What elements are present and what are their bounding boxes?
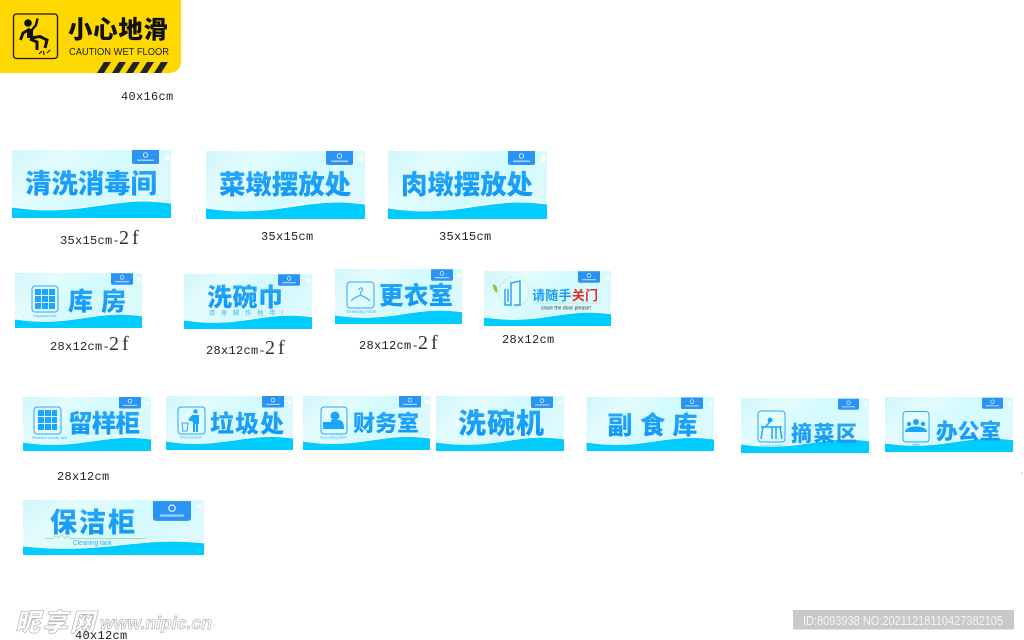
icon: picking table (758, 411, 785, 442)
sign caption: Cleaning tank (73, 540, 112, 547)
sign: 洗碗巾 (184, 274, 312, 329)
size label: 28x12cm (57, 470, 110, 484)
sign: 菜墩摆放处 (206, 151, 365, 219)
icon: people (903, 412, 929, 442)
sign caption: Dressing room (347, 309, 377, 314)
sign caption: office (912, 443, 920, 447)
sign: 财务室 (303, 396, 430, 450)
sign title: 保洁柜 (50, 508, 135, 538)
sign: 洗碗机 (436, 396, 564, 451)
icon: hanger (347, 282, 374, 308)
watermark: nipic: 昵享网 (15, 609, 99, 637)
caution title: 小心地滑 (68, 16, 168, 44)
sign title: 更衣室 (379, 281, 453, 310)
sign title: 库房 (68, 288, 126, 316)
size label: 28x12cm-2f (359, 332, 441, 354)
watermark: nipic: www.nipic.cn (100, 613, 212, 633)
icon: door with leaf (493, 277, 529, 307)
sign caption: close the door please! (541, 306, 591, 312)
sign title: 财务室 (353, 411, 419, 436)
sign: 更衣室 (335, 269, 462, 324)
sign: 请随手关门 (484, 271, 611, 326)
icon: grid (32, 286, 58, 312)
sign caption: Disposal Area (180, 436, 202, 440)
sign title: 摘菜区 (791, 422, 857, 446)
sign title: 办公室 (936, 419, 1001, 444)
watermark: nipic (15, 609, 212, 637)
sign title: 清洗消毒间 (25, 169, 157, 199)
image id text: ID:8093938 NO:20211218110427382105 (803, 614, 1003, 628)
size label 40x16: 40x16cm (121, 90, 174, 104)
sign caption: Disposal Area (33, 314, 57, 318)
sign caption: Retention sample cark (32, 436, 67, 440)
icon: cabinet (34, 407, 61, 434)
sign title: 垃圾处 (210, 410, 284, 438)
sign: 摘菜区 (741, 398, 869, 453)
sign caption: 请身脚作他用! (209, 309, 283, 317)
hazard stripes (97, 62, 168, 73)
size label: 28x12cm-2f (206, 337, 288, 359)
icon: accountant (321, 407, 347, 434)
sign title: 洗碗巾 (207, 284, 283, 312)
sign: 肉墩摆放处 (388, 151, 547, 219)
sign title: 留样柜 (68, 409, 140, 438)
image id bar (793, 610, 1014, 630)
sign title: 洗碗机 (458, 407, 544, 439)
sign title: 副食库 (608, 411, 698, 440)
caution sign: wet floor (0, 0, 181, 73)
sign: 留样柜 (23, 397, 151, 451)
icon: person and bin (178, 407, 205, 434)
sign: 副食库 (586, 397, 714, 451)
sign: 垃圾处 (166, 396, 293, 450)
sign title: 肉墩摆放处 (401, 170, 534, 200)
size label: 28x12cm (502, 333, 555, 347)
size label: 35x15cm (439, 230, 492, 244)
sign title: 菜墩摆放处 (219, 170, 352, 200)
size label: 35x15cm-2f (60, 227, 142, 249)
sign: 清洗消毒间 (12, 150, 171, 218)
sign: 保洁柜 (23, 500, 204, 555)
sign caption: Accounting office (320, 436, 347, 440)
green line (532, 302, 600, 304)
sign: 库房 (15, 273, 142, 328)
sign: 办公室 (885, 397, 1013, 452)
size label: 28x12cm-2f (50, 333, 132, 355)
speck (1021, 472, 1023, 474)
sign title: 请随手关门 (532, 288, 598, 303)
caution subtitle: CAUTION WET FLOOR (69, 47, 169, 58)
sign caption: To pick a pass (760, 444, 782, 448)
green underline (45, 535, 145, 538)
icon: person slipping (14, 14, 58, 58)
size label: 35x15cm (261, 230, 314, 244)
